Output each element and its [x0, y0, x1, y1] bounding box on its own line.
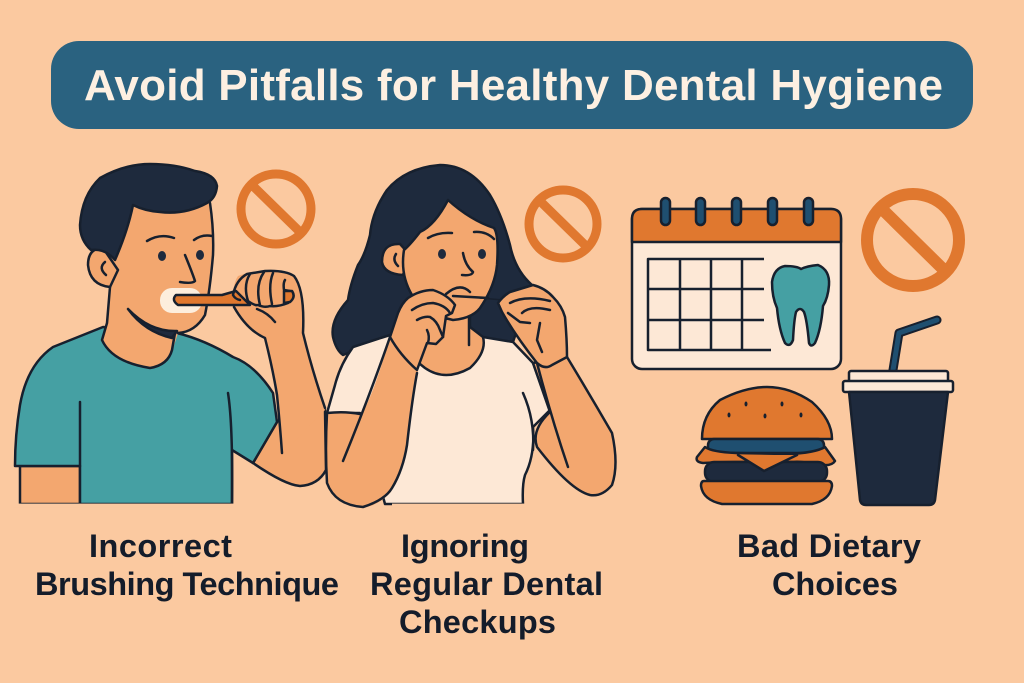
man's t-shirt [15, 327, 277, 504]
icon: drink cup [843, 320, 953, 505]
man's neck outline [102, 287, 175, 368]
man's neck and face skin [102, 195, 213, 368]
caption: ignoring regular dental checkups: Ignoring [401, 528, 529, 564]
caption: ignoring regular dental checkups: Regular Dental [370, 566, 603, 602]
man's jaw outline [178, 203, 213, 333]
burger sesame seeds [728, 402, 802, 418]
woman's face [403, 200, 498, 320]
dental floss [480, 298, 503, 300]
man's beard shadow [128, 309, 177, 338]
title banner [51, 41, 973, 129]
caption: bad dietary choices: Choices [772, 566, 898, 602]
toothbrush [174, 291, 250, 305]
caption: incorrect brushing technique: Brushing Technique [35, 566, 339, 602]
man's left sleeve arm [20, 466, 80, 504]
man's hair [80, 164, 217, 260]
icon: tooth [772, 265, 829, 346]
woman's neck [415, 316, 484, 375]
panel: incorrect brushing [15, 164, 326, 504]
woman's left arm [326, 337, 427, 507]
woman's hair [333, 165, 532, 355]
toothpaste foam [160, 288, 202, 313]
caption: bad dietary choices: Bad Dietary [737, 528, 921, 564]
caption: ignoring regular dental checkups: Checkups [399, 604, 556, 640]
title: Avoid Pitfalls for Healthy Dental Hygiene [84, 61, 943, 110]
calendar grid [648, 259, 771, 350]
woman's ear [382, 244, 410, 275]
icon: food prohibition sign [867, 194, 959, 286]
cup straw [893, 320, 937, 370]
woman's left hand [390, 290, 455, 370]
woman's white t-shirt [327, 335, 550, 504]
calendar rings [661, 198, 813, 225]
man's forearm and fist [233, 271, 325, 454]
woman's right arm [533, 357, 616, 495]
man's eyes [158, 250, 204, 261]
caption: ignoring regular dental checkups [370, 528, 603, 640]
man's eyebrows and nose [147, 236, 212, 283]
man's raised arm upper section [253, 400, 326, 486]
caption: incorrect brushing technique [35, 528, 339, 602]
caption: bad dietary choices [737, 528, 921, 602]
clean crop along the bottom of the figures [14, 504, 525, 508]
icon: man's prohibition sign [241, 174, 311, 244]
icon: calendar [632, 198, 841, 369]
woman's brows, nose and mouth [428, 232, 494, 298]
panel: ignoring checkups [326, 165, 616, 507]
woman's eyes [438, 249, 486, 259]
panel: calendar and food [632, 198, 953, 505]
caption: incorrect brushing technique: Incorrect [89, 528, 232, 564]
icon: woman's prohibition sign [529, 190, 597, 258]
woman's right hand [498, 285, 567, 367]
man's ear [88, 248, 118, 287]
icon: burger [697, 387, 835, 504]
